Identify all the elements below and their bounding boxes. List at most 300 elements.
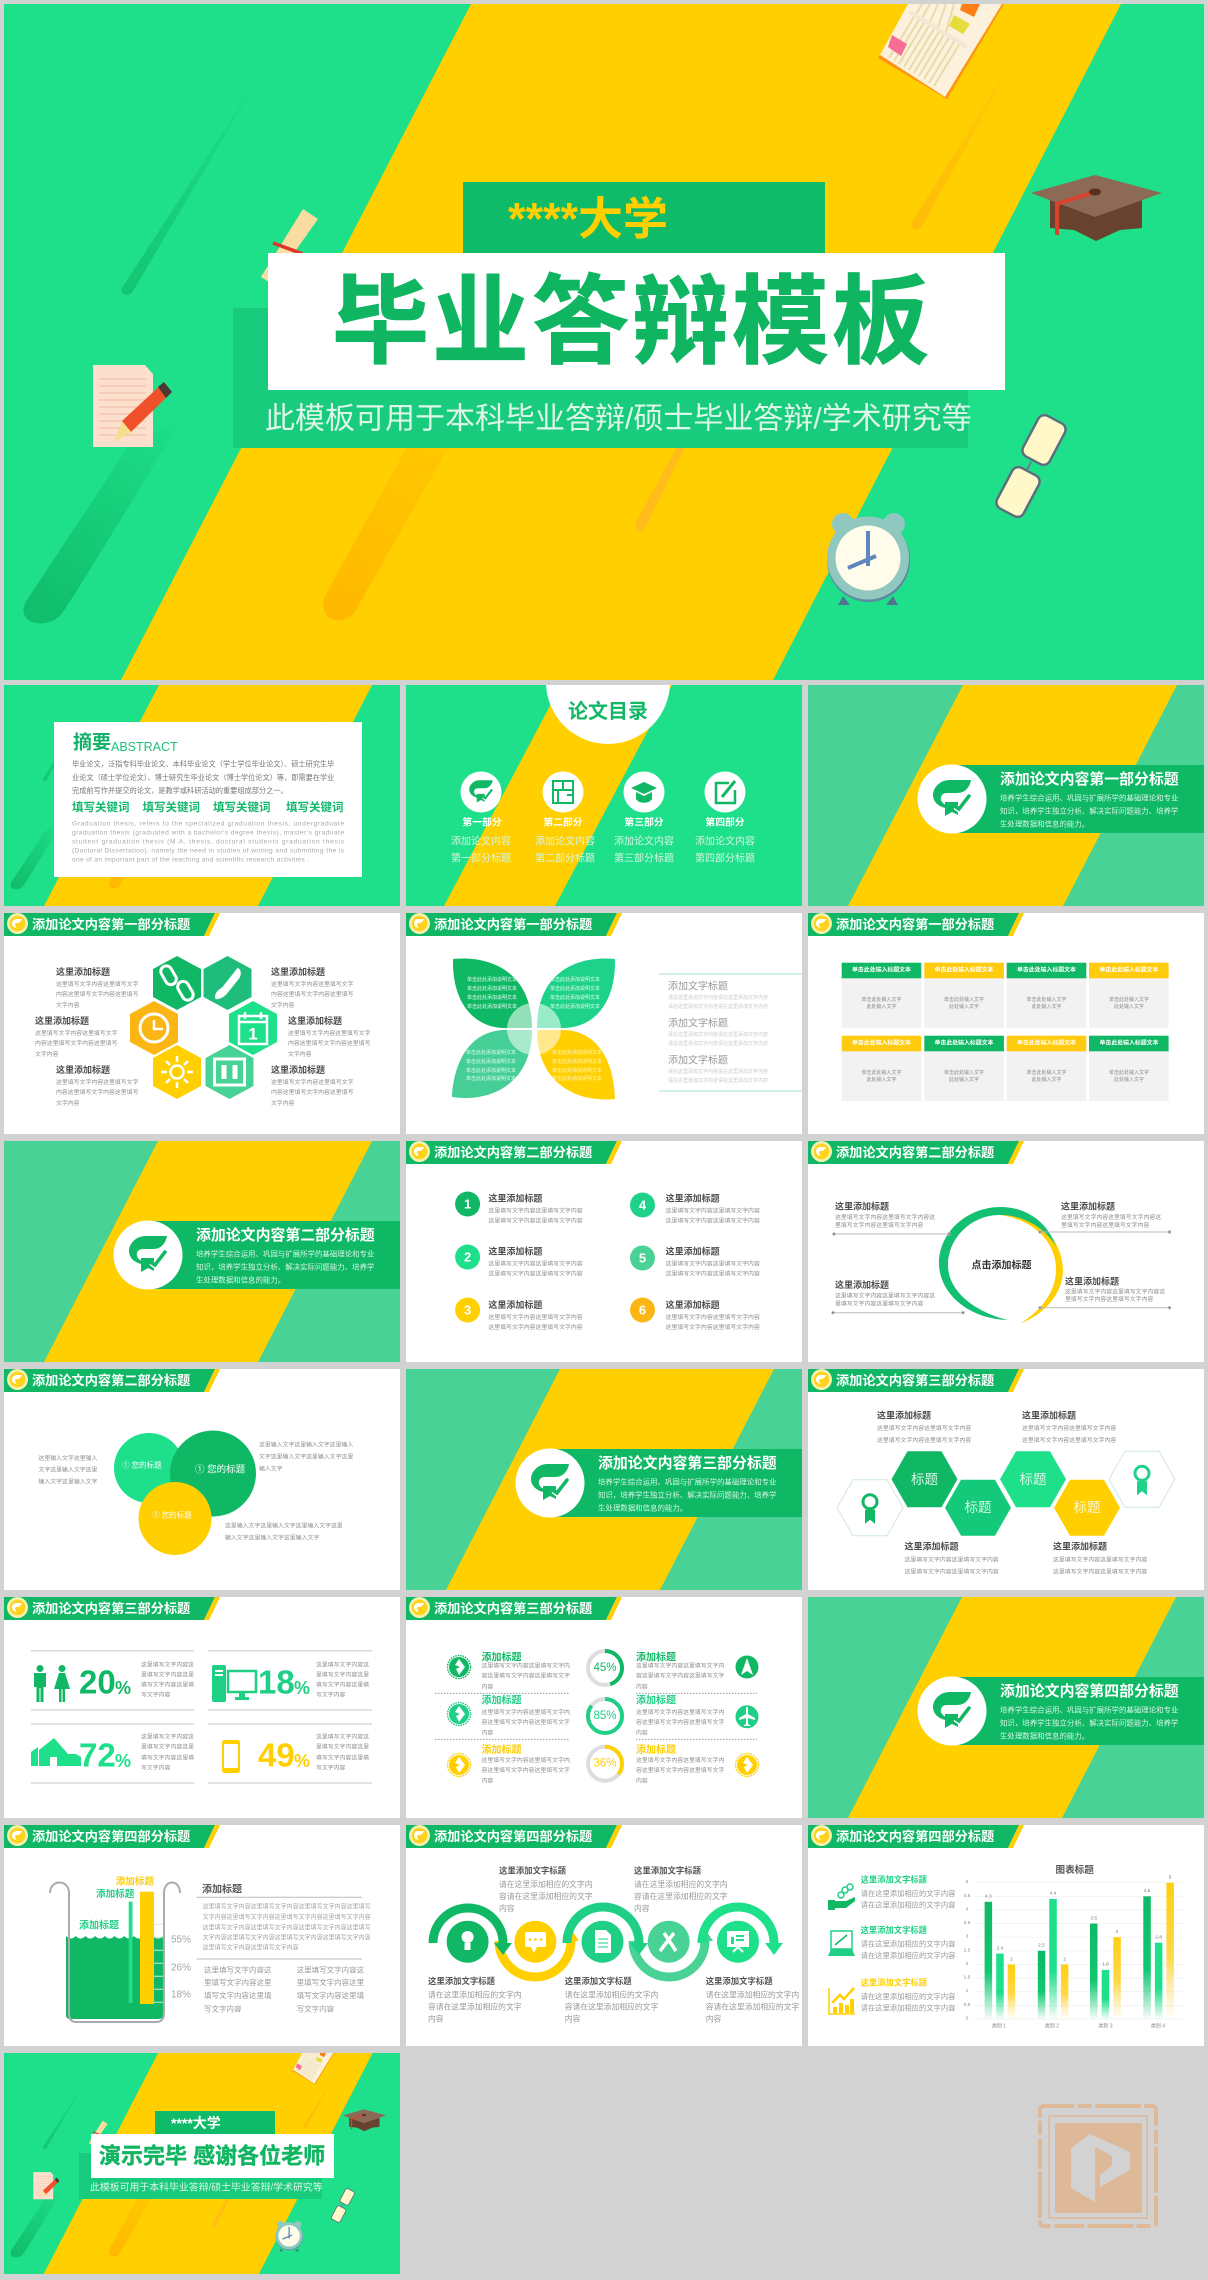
- stat 18%: 18: [258, 1664, 295, 1700]
- contents item 4: [695, 772, 755, 864]
- petal text: bottom left: 单击此处添加说明文本: [466, 1067, 516, 1074]
- hexagon A: 标题: [911, 1472, 938, 1487]
- section band: 培养学生综合运用、巩固与扩展所学的基础理论和专业: [1000, 792, 1178, 802]
- text bottom 3: 内容: [706, 2014, 721, 2024]
- outlined hexagon left with ribbon: [837, 1480, 903, 1536]
- card 7: 此处输入文字: [1031, 1076, 1062, 1083]
- side text 2: 请在这里添加文字内容请在这里添加文字内容: [668, 1031, 768, 1038]
- header bar: 添加论文内容第一部分标题: [836, 916, 994, 932]
- card 6: 单击此处输入文字: [944, 1069, 984, 1076]
- item 1: 这里添加标题: [488, 1193, 542, 1204]
- row left 1: [482, 1650, 570, 1690]
- text bottom 2: 请在这里添加相应的文字内: [565, 1990, 658, 2000]
- card 4: 此处输入文字: [1114, 1003, 1144, 1010]
- stat text 2: 这里填写文字内容这: [316, 1661, 369, 1669]
- item 6: [630, 1298, 760, 1331]
- slide: hexagon list: [4, 913, 400, 1134]
- contents item 3: [614, 772, 674, 864]
- yellow band: [444, 685, 672, 906]
- donut 85%: [588, 1699, 622, 1733]
- stat 49%: 49: [258, 1736, 295, 1774]
- axis labels: 1: [966, 1988, 969, 1994]
- text top right: 这里添加标题: [1061, 1201, 1115, 1212]
- icon: alarm clock: [827, 513, 910, 605]
- header bar: [4, 1825, 220, 1848]
- header bar: [808, 1369, 1024, 1392]
- legend text 1: 请在这里添加相应的文字内容: [861, 1889, 955, 1898]
- contents item 1: 第一部分: [462, 816, 502, 828]
- item 6: 这里填写文字内容这里填写文字内容: [666, 1313, 760, 1321]
- section band: 添加论文内容第四部分标题: [1000, 1682, 1179, 1700]
- stat text 4: 这里填写文字内容这: [316, 1732, 369, 1740]
- beaker column text left: 填写文字内容这里填: [204, 1990, 272, 2000]
- step arc 2 yellow: [499, 1929, 579, 1977]
- beaker column text right: 填写文字内容这里填: [297, 1990, 365, 2000]
- text bottom 1: 这里填写文字内容这里填写文字内容: [904, 1555, 999, 1563]
- section band: 生处理数据和信息的能力。: [1000, 1730, 1089, 1740]
- card 7: 单击此处输入文字: [1026, 1069, 1067, 1076]
- text block: top left: 内容这里填写文字内容这里填写: [56, 990, 139, 998]
- step arc 4 teal: [633, 1929, 713, 1977]
- petal text: top left: 单击此处添加说明文本: [467, 976, 517, 983]
- card 1: 此处输入文字: [866, 1003, 897, 1010]
- header bar: [808, 1825, 1024, 1848]
- subtitle band: [233, 308, 968, 448]
- axis labels: 0.5: [964, 2002, 971, 2008]
- text left: 这里输入文字这里输入: [38, 1454, 98, 1462]
- side text 2: 添加文字标题: [668, 1016, 728, 1030]
- text block: bottom left: 内容这里填写文字内容这里填写: [56, 1088, 139, 1096]
- hexagon: clock: [130, 1001, 178, 1055]
- text right: 文字这里输入文字这里输入文字这里: [259, 1453, 353, 1461]
- stat text 3: 写文字内容: [141, 1763, 171, 1771]
- row left 1: 这里填写文字内容这里填写文字内: [482, 1662, 570, 1670]
- stat 20%: %: [115, 1678, 131, 1698]
- icon: paper and pencil: [93, 365, 172, 447]
- keywords: 填写关键词: [213, 800, 270, 814]
- item 4: 4: [639, 1198, 647, 1212]
- value labels: [985, 1874, 1172, 1968]
- section band: 培养学生综合运用、巩固与扩展所学的基础理论和专业: [598, 1476, 776, 1486]
- icon: glasses: [994, 413, 1068, 519]
- side text 3: 请在这里添加文字内容请在这里添加文字内容: [668, 1077, 768, 1084]
- row left 2: 内容: [482, 1728, 493, 1736]
- contents item 2: 添加论文内容: [535, 834, 595, 848]
- card 6: 此处输入文字: [949, 1076, 979, 1083]
- beaker column text left: 里填写文字内容这里: [204, 1977, 272, 1987]
- item 2: 这里填写文字内容这里填写文字内容: [488, 1260, 583, 1268]
- hexagon: chain: [153, 956, 201, 1010]
- row left 2: 这里填写文字内容这里填写文字内: [482, 1708, 570, 1716]
- petal text: bottom left: 单击此处添加说明文本: [466, 1049, 516, 1056]
- stat text 3: 填写文字内容这里填: [141, 1753, 194, 1761]
- row right 1: 添加标题: [636, 1650, 676, 1664]
- text bottom: [225, 1522, 343, 1541]
- step 2 chat: [514, 1921, 556, 1963]
- stat text 2: 里填写文字内容这里: [316, 1671, 369, 1679]
- slide: table of contents: [406, 685, 802, 906]
- legend text 1: [861, 1874, 955, 1910]
- header bar: 添加论文内容第一部分标题: [434, 916, 592, 932]
- petal text: bottom right: 单击此处添加说明文本: [552, 1075, 602, 1082]
- petal text: top left: [467, 976, 517, 1010]
- hexagon D: 标题: [1074, 1500, 1100, 1515]
- step 5 presentation: [717, 1921, 759, 1963]
- legend text 2: 请在这里添加相应的文字内容: [861, 1951, 955, 1960]
- category labels: 类别 3: [1098, 2023, 1113, 2030]
- text bottom left: 里填写文字内容这里填写文字内容: [835, 1300, 923, 1308]
- header bar: [808, 913, 1024, 936]
- beaker column text right: 这里填写文字内容这: [297, 1964, 365, 1974]
- item 1: 这里填写文字内容这里填写文字内容: [488, 1217, 583, 1225]
- contents heading: 论文目录: [568, 699, 648, 723]
- text block: bottom right: 这里添加标题: [271, 1064, 325, 1075]
- bars category 4: [1143, 1883, 1174, 2019]
- text block: top left: 这里添加标题: [56, 966, 110, 977]
- petal text: bottom right: 单击此处添加说明文本: [552, 1049, 602, 1056]
- card 4: 单击此处输入文字: [1109, 996, 1149, 1003]
- badge left 3: [448, 1754, 470, 1776]
- slide: beaker chart: [4, 1825, 400, 2046]
- closing title box: [91, 2134, 334, 2178]
- item 2: 这里添加标题: [488, 1246, 542, 1257]
- card 6: 单击此处输入标题文本: [935, 1038, 994, 1046]
- text block: top right: 这里填写文字内容这里填写文字: [271, 980, 354, 988]
- text top 1: 这里填写文字内容这里填写文字内容: [877, 1436, 971, 1444]
- university label box: ****大学: [508, 194, 668, 244]
- text bottom 2: 这里添加文字标题: [565, 1976, 632, 1986]
- item 1: [455, 1192, 583, 1225]
- card 4: 单击此处输入标题文本: [1100, 966, 1159, 974]
- yellow band: [44, 1141, 372, 1362]
- icon: desktop computer: [212, 1665, 256, 1702]
- item 5: 这里添加标题: [666, 1246, 720, 1257]
- icon: hand with coins: [828, 1884, 855, 1910]
- header bar: [4, 1369, 220, 1392]
- section band: 知识，培养学生独立分析、解决实际问题能力、培养学: [598, 1490, 777, 1500]
- axis labels: 2: [966, 1961, 969, 1967]
- step 4 tools: [648, 1921, 690, 1963]
- donut 36%: [588, 1747, 622, 1781]
- section band: 生处理数据和信息的能力。: [1000, 818, 1089, 828]
- slide: card grid: [808, 913, 1204, 1134]
- closing subtitle band: [79, 2153, 322, 2199]
- header bar: 添加论文内容第三部分标题: [434, 1600, 592, 1616]
- text top 1: 这里添加文字标题: [499, 1866, 567, 1876]
- yellow band: [44, 685, 372, 906]
- contents item 4: 第四部分标题: [695, 852, 755, 864]
- contents item 1: 第一部分标题: [451, 852, 511, 864]
- section band: 培养学生综合运用、巩固与扩展所学的基础理论和专业: [196, 1248, 374, 1258]
- side text 1: [668, 980, 768, 1010]
- beaker column text right: 写文字内容: [297, 2004, 335, 2014]
- stat text 3: [141, 1732, 194, 1771]
- card 6: [924, 1036, 1004, 1101]
- beaker label yellow: 添加标题: [116, 1876, 154, 1888]
- value labels: 2: [1063, 1956, 1066, 1962]
- hexagon: sun: [153, 1045, 201, 1099]
- text block: bottom left: 这里填写文字内容这里填写文字: [56, 1078, 139, 1086]
- legend text 1: 请在这里添加相应的文字内容: [861, 1900, 955, 1910]
- text bottom right: [1065, 1276, 1165, 1303]
- subtitle: 此模板可用于本科毕业答辩/硕士毕业答辩/学术研究等: [265, 402, 972, 436]
- section band: 培养学生综合运用、巩固与扩展所学的基础理论和专业: [1000, 1704, 1178, 1714]
- badge left 2: [448, 1702, 470, 1726]
- donut 36%: 36%: [593, 1758, 617, 1770]
- text top 2: 容请在这里添加相应的文字: [634, 1891, 728, 1901]
- circle 2: ① 您的标题: [195, 1464, 246, 1476]
- hexagon D: [1054, 1480, 1120, 1536]
- text bottom: 这里输入文字这里输入文字这里输入文字这里: [225, 1522, 343, 1530]
- circle 3: ② 您的标题: [152, 1510, 192, 1520]
- beaker body text: 文字内容这里填写文字内容这里填写文字内容这里填写文字内容: [203, 1913, 371, 1921]
- row right 3: 容这里填写文字内容这里填写文字: [636, 1766, 724, 1774]
- closing title box: 演示完毕 感谢各位老师: [99, 2144, 325, 2168]
- row right 1: [636, 1650, 724, 1690]
- step arc 3 green: [567, 1907, 648, 1955]
- text bottom 3: [706, 1976, 799, 2024]
- value labels: 2.5: [1038, 1942, 1045, 1948]
- side text 2: 请在这里添加文字内容请在这里添加文字内容: [668, 1040, 768, 1047]
- card 3: 单击此处输入标题文本: [1017, 966, 1076, 974]
- text block: bottom left: 这里添加标题: [56, 1064, 110, 1075]
- contents item 3: 第三部分: [624, 816, 664, 828]
- card 5: 此处输入文字: [866, 1076, 897, 1083]
- text bottom 3: 这里添加文字标题: [706, 1976, 773, 1986]
- text bottom right: 里填写文字内容这里填写文字内容: [1065, 1295, 1153, 1303]
- row right 1: 内容: [636, 1682, 648, 1690]
- beaker column text left: [204, 1964, 272, 2014]
- keywords: 填写关键词: [142, 800, 200, 814]
- stat 20%: 20: [79, 1664, 116, 1700]
- row left 2: 添加标题: [482, 1694, 522, 1706]
- axis labels: 4: [966, 1906, 969, 1912]
- text right: 这里输入文字这里输入文字这里输入: [259, 1441, 353, 1449]
- side text 1: 请在这里添加文字内容请在这里添加文字内容: [668, 1003, 768, 1010]
- side text 1: 请在这里添加文字内容请在这里添加文字内容: [668, 994, 768, 1001]
- text top left: [835, 1201, 935, 1229]
- stat text 2: [316, 1661, 369, 1699]
- text bottom 2: 这里填写文字内容这里填写文字内容: [1053, 1555, 1147, 1563]
- card 3: 此处输入文字: [1031, 1003, 1062, 1010]
- beaker body text: 文字内容这里填写文字内容这里填写文字内容这里填写文字内容: [203, 1933, 371, 1941]
- stat text 1: 这里填写文字内容这: [141, 1661, 194, 1669]
- category labels: 类别 2: [1045, 2023, 1059, 2030]
- slide: central ring: [808, 1141, 1204, 1362]
- text top 1: [877, 1409, 971, 1444]
- text block: middle right: 这里填写文字内容这里填写文字: [288, 1029, 371, 1037]
- icon: open book: [878, 4, 1004, 99]
- circle 2: [170, 1430, 256, 1516]
- legend text 2: 请在这里添加相应的文字内容: [861, 1940, 955, 1948]
- text left: 文字这里输入文字这里: [38, 1466, 98, 1474]
- beaker body text: 这里填写文字内容这里填写文字内容: [203, 1944, 299, 1952]
- text right: [259, 1441, 353, 1472]
- hexagon B: [945, 1480, 1011, 1536]
- abstract Chinese body: 完成前写作并提交的论文，是教学或科研活动的重要组成部分之一。: [72, 786, 288, 795]
- header bar: [406, 1597, 622, 1620]
- section band: 添加论文内容第二部分标题: [196, 1226, 375, 1244]
- text bottom 1: 这里填写文字内容这里填写文字内容: [904, 1567, 999, 1575]
- value labels: 4.5: [1144, 1888, 1151, 1894]
- header bar: 添加论文内容第二部分标题: [434, 1144, 592, 1160]
- text block: middle right: 这里添加标题: [288, 1015, 342, 1026]
- hexagon B: 标题: [964, 1500, 992, 1515]
- contents item 3: 添加论文内容: [614, 834, 674, 848]
- slide: percentage stats: [4, 1597, 400, 1818]
- step 3 document: [582, 1921, 624, 1963]
- text top 1: 这里添加标题: [877, 1409, 931, 1420]
- ring graphic: 点击添加标题: [972, 1258, 1032, 1272]
- text block: top right: 内容这里填写文字内容这里填写: [271, 990, 354, 998]
- card 7: [1007, 1036, 1086, 1101]
- circle 3: [138, 1482, 212, 1555]
- contents item 3: 第三部分标题: [614, 852, 674, 864]
- card 3: 单击此处输入文字: [1026, 996, 1067, 1003]
- abstract English body: student graduation thesis (M.A. thesis, doctoral students graduation thesis: [72, 838, 345, 846]
- legend text 3: 请在这里添加相应的文字内容: [861, 1992, 955, 2001]
- text block: bottom right: [271, 1064, 354, 1107]
- petal text: top left: 单击此处添加说明文本: [467, 994, 517, 1001]
- petal text: bottom left: 单击此处添加说明文本: [466, 1058, 516, 1065]
- header bar: [406, 1141, 622, 1164]
- text top left: 这里填写文字内容这里填写文字内容这: [835, 1213, 935, 1221]
- item 6: 这里添加标题: [666, 1299, 720, 1310]
- text top 2: 这里添加文字标题: [634, 1866, 702, 1876]
- section band: [516, 1448, 802, 1518]
- section band: 知识，培养学生独立分析、解决实际问题能力、培养学: [1000, 1718, 1179, 1728]
- stat text 4: 填写文字内容这里填: [316, 1753, 369, 1761]
- text bottom 1: 请在这里添加相应的文字内: [428, 1990, 522, 2000]
- axis labels: 1.5: [964, 1975, 971, 1981]
- text block: bottom left: [56, 1064, 139, 1107]
- percent labels: 18%: [171, 1990, 191, 2000]
- side text 3: 请在这里添加文字内容请在这里添加文字内容: [668, 1068, 768, 1075]
- text top 1: 内容: [499, 1903, 515, 1913]
- row right 3: 内容: [636, 1777, 648, 1785]
- text block: middle right: [288, 1015, 371, 1058]
- text block: middle left: 这里添加标题: [35, 1015, 89, 1026]
- text top left: 这里添加标题: [835, 1201, 889, 1212]
- contents item 4: 添加论文内容: [695, 834, 755, 848]
- badge right 1: [736, 1656, 758, 1678]
- beaker text heading: 添加标题: [202, 1882, 242, 1896]
- contents item 1: 添加论文内容: [451, 834, 511, 848]
- contents item 2: 第二部分: [543, 816, 583, 828]
- slide: wave process: [406, 1825, 802, 2046]
- row right 2: [636, 1694, 724, 1736]
- slide: title cover: [4, 4, 1204, 680]
- abstract English body: [72, 820, 345, 864]
- icon: house: [31, 1738, 81, 1766]
- text right: 输入文字: [259, 1464, 283, 1472]
- stat text 1: [141, 1661, 194, 1699]
- section band: 知识，培养学生独立分析、解决实际问题能力、培养学: [1000, 806, 1179, 816]
- abstract Chinese body: 业论文（硕士学位论文）、博士研究生毕业论文（博士学位论文）等，即需要在学业: [72, 773, 334, 782]
- beaker body text: [203, 1903, 371, 1952]
- keywords: [72, 800, 344, 814]
- value labels: 4.3: [985, 1894, 992, 1900]
- row left 3: 容这里填写文字内容这里填写文字: [482, 1766, 570, 1774]
- value labels: 5: [1169, 1874, 1172, 1880]
- stat 49%: %: [294, 1751, 310, 1771]
- stat text 4: [316, 1732, 369, 1771]
- text bottom 2: 容请在这里添加相应的文字: [565, 2002, 658, 2012]
- text top 1: 容请在这里添加相应的文字: [499, 1891, 593, 1901]
- axis labels: 5: [966, 1879, 969, 1885]
- text bottom 1: [428, 1976, 522, 2024]
- item 3: 这里填写文字内容这里填写文字内容: [488, 1313, 583, 1321]
- abstract heading: 摘要: [73, 730, 111, 754]
- text block: top right: 这里添加标题: [271, 966, 325, 977]
- stat text 4: 里填写文字内容这里: [316, 1742, 369, 1750]
- card 5: 单击此处输入标题文本: [852, 1038, 911, 1046]
- hexagon C: 标题: [1020, 1472, 1046, 1487]
- badge right 3: [736, 1754, 758, 1776]
- row left 1: 容这里填写文字内容这里填写文字: [482, 1672, 570, 1680]
- contents item 2: [535, 772, 595, 864]
- stat 18%: %: [294, 1678, 310, 1698]
- section band: [918, 764, 1204, 834]
- category labels: 类别 4: [1151, 2023, 1165, 2030]
- circle 1: ① 您的标题: [122, 1460, 162, 1470]
- contents heading: [546, 620, 670, 744]
- row left 1: 添加标题: [482, 1650, 522, 1664]
- stat text 2: 写文字内容: [316, 1691, 346, 1699]
- text block: middle left: 内容这里填写文字内容这里填写: [35, 1039, 118, 1047]
- slide: hexagon chain: [808, 1369, 1204, 1590]
- petal text: top right: 单击此处添加说明文本: [550, 994, 600, 1001]
- keywords: 填写关键词: [286, 800, 344, 814]
- stat 72%: 72: [79, 1736, 116, 1774]
- card 2: [924, 963, 1004, 1028]
- card 8: [1089, 1036, 1169, 1101]
- value labels: 2: [1010, 1956, 1013, 1962]
- axis labels: 3.5: [964, 1920, 971, 1926]
- item 3: 3: [464, 1302, 471, 1318]
- text bottom left: 这里添加标题: [835, 1279, 889, 1290]
- icon: graduation cap: [1031, 175, 1162, 241]
- bars category 2: [1038, 1899, 1068, 2019]
- icon: diploma scroll: [261, 209, 318, 284]
- card 8: 此处输入文字: [1114, 1076, 1144, 1083]
- chart title: 图表标题: [1056, 1864, 1094, 1876]
- contents item 2: 第二部分标题: [535, 852, 595, 864]
- icon: man and woman: [34, 1665, 70, 1702]
- slide: abstract: [4, 685, 400, 906]
- petal text: bottom right: 单击此处添加说明文本: [552, 1067, 602, 1074]
- item 5: 这里填写文字内容这里填写文字内容: [666, 1270, 760, 1278]
- bars category 1: [985, 1902, 1015, 2019]
- text bottom 2: 这里填写文字内容这里填写文字内容: [1053, 1567, 1147, 1575]
- stat text 3: 里填写文字内容这里: [141, 1742, 194, 1750]
- card 5: [842, 1036, 921, 1101]
- abstract English body: one of an important part of the teaching and scientific research activities .: [72, 856, 309, 864]
- row right 2: 添加标题: [636, 1694, 676, 1706]
- text top 1: [499, 1866, 593, 1913]
- stat text 1: 里填写文字内容这里: [141, 1671, 194, 1679]
- header bar: 添加论文内容第三部分标题: [836, 1372, 994, 1388]
- section band: 添加论文内容第三部分标题: [598, 1454, 777, 1472]
- header bar: [406, 913, 622, 936]
- petal text: top right: 单击此处添加说明文本: [550, 976, 600, 983]
- value labels: 1.8: [1102, 1962, 1109, 1968]
- text top 2: [1022, 1409, 1116, 1444]
- header bar: 添加论文内容第二部分标题: [836, 1144, 994, 1160]
- axis labels: 2.5: [964, 1947, 971, 1953]
- yellow diagonal band: [121, 4, 1121, 680]
- legend text 3: 这里添加文字标题: [861, 1977, 928, 1987]
